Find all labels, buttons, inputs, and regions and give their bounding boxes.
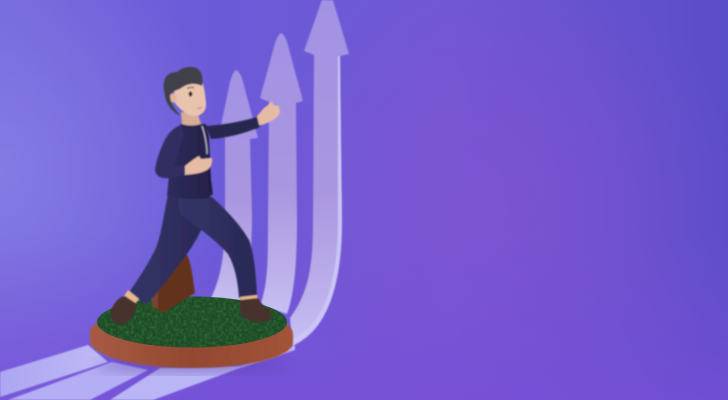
right arm, reaching bbox=[206, 117, 260, 139]
neck bbox=[181, 112, 201, 126]
front ankle bbox=[240, 295, 258, 302]
disc shadow bbox=[96, 360, 288, 372]
mouth bbox=[197, 107, 202, 108]
arrow 2: medium rising arrow bbox=[260, 33, 303, 314]
front leg bbox=[178, 197, 257, 298]
brown block behind figure bbox=[152, 254, 195, 313]
eyebrow bbox=[187, 87, 194, 88]
arrow 1: small rising arrow bbox=[211, 70, 258, 305]
figure: man in dark suit bbox=[111, 67, 280, 325]
eye bbox=[189, 91, 192, 97]
grass disc base bbox=[90, 296, 293, 368]
ear bbox=[170, 94, 176, 102]
face bbox=[173, 82, 206, 116]
reaching hand bbox=[257, 101, 280, 125]
back leg bbox=[127, 195, 212, 304]
back shoe bbox=[111, 296, 137, 325]
torso jacket bbox=[167, 124, 213, 199]
left arm, bent bbox=[155, 125, 186, 178]
jacket zipper bbox=[202, 126, 207, 154]
hair bbox=[164, 67, 203, 116]
arrow 3: tallest rising arrow bbox=[290, 0, 349, 346]
grass top bbox=[97, 296, 287, 348]
floor ribbons: arrow tails on the ground bbox=[0, 345, 295, 400]
front shoe bbox=[240, 298, 272, 322]
back ankle bbox=[124, 290, 139, 305]
chest hand bbox=[185, 156, 212, 175]
disc rim bbox=[90, 304, 293, 368]
